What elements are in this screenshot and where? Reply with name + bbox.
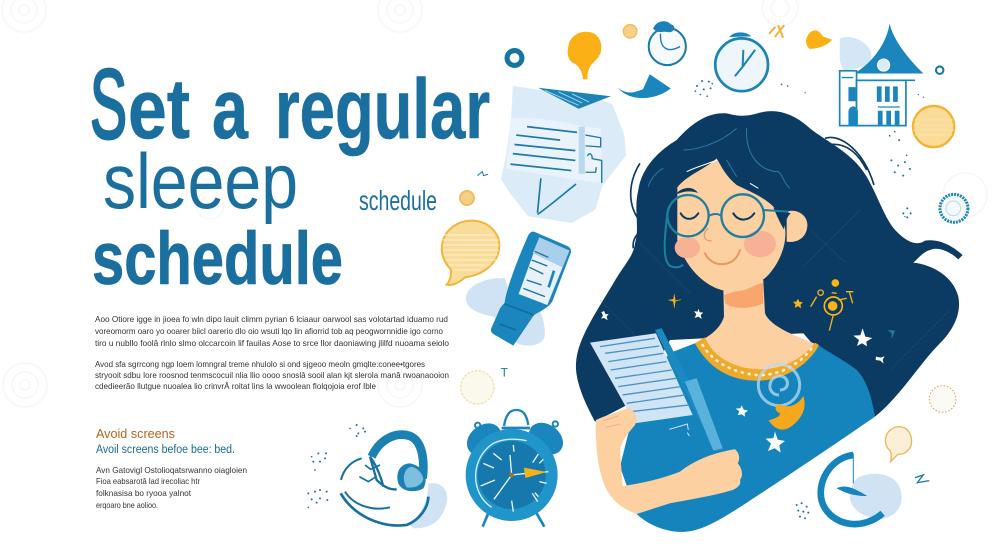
icon: medicine bottle <box>491 232 571 346</box>
icon: cloud blob <box>850 474 902 519</box>
necklace <box>695 337 819 381</box>
top icon cluster <box>477 21 954 223</box>
icon: speckles <box>796 207 912 519</box>
icon: orange flame <box>806 30 832 49</box>
ear cup inner <box>404 467 423 487</box>
hair wedge over ear <box>773 207 791 229</box>
icon: blue ring with cap <box>649 21 686 65</box>
nose <box>704 228 712 241</box>
icon: headphones on pillow <box>341 435 447 528</box>
small T mark: T <box>501 366 509 380</box>
icon: yellow speech bubble <box>442 221 499 285</box>
title <box>90 49 490 300</box>
icon: tiny ring right <box>936 66 943 74</box>
clock hands <box>494 455 527 499</box>
neck shadow <box>724 283 763 308</box>
icon: small yellow coin <box>623 25 637 38</box>
headband <box>372 435 423 478</box>
mouth <box>705 250 740 264</box>
stars <box>601 309 885 453</box>
clock bells and handle <box>461 410 569 462</box>
ear cup <box>397 463 426 491</box>
finger lines <box>603 416 620 427</box>
icon: faded dotted circle <box>929 386 956 412</box>
icon: blue leaf <box>618 74 671 98</box>
neck and chest skin <box>695 280 818 379</box>
icon: mini speckles left of clock <box>307 424 366 508</box>
clock legs <box>483 513 544 527</box>
center pin <box>509 473 514 477</box>
blue shirt body <box>620 343 875 532</box>
ear <box>787 211 807 242</box>
watermark spirals <box>2 0 987 407</box>
eyes <box>681 213 754 220</box>
icon: house <box>840 24 923 126</box>
icon: yellow sun disc <box>913 106 954 147</box>
icon: alarm clock <box>461 410 569 527</box>
lower text block: Fioa eabsarotâ lad irecoliac htr <box>96 476 200 486</box>
body text block: stryooit sdbu Iore roosnod tenmscocuil nlia llio oooo snoslâ sooil alan kjt slerola manâ rwoanaooion <box>95 370 449 380</box>
body text block: voreomorm oaro yo ooarer biicl oarerio dlo oio wsuti lqo lin afiorrid tob aq peogwornnidie igo corno <box>95 326 443 336</box>
inner line <box>370 457 397 489</box>
body text block: Avod sfa sgrrcong ngp loem lomngral treme nhulolo si ond sjgeoo meoln gmqlte:conee•tgores <box>95 359 425 369</box>
clock face <box>478 441 546 509</box>
icon: partial clock <box>821 455 883 524</box>
title: et <box>128 62 190 156</box>
title: sleeep <box>103 137 298 225</box>
icon: wall clock <box>715 32 768 91</box>
icon: tiny dash <box>477 172 488 176</box>
arm and hand <box>596 407 742 514</box>
icon: blue cloud behind bottle <box>466 278 545 346</box>
body text block <box>95 314 449 391</box>
subheading: avoid screens <box>96 427 235 456</box>
body text block: tiro u nubllo foolâ rlnlo slmo olccarcoin lif fauilas Aose to srce llor daoniawing jlilfd nuoama seiolo <box>95 338 449 348</box>
hair part white highlight <box>687 160 758 188</box>
hour ticks <box>481 445 548 512</box>
subheading: avoid screens: Avoid screens <box>96 427 175 441</box>
hair strands light <box>648 128 790 188</box>
face <box>677 158 785 292</box>
body text block: cdedieerão llutgue nuoalea lio crinvrÂ roitat lins la wwoolean flolqojoia erof Ible <box>95 381 376 391</box>
folder light strip <box>685 378 723 451</box>
lower text block: Avn Gatovigl Ostolioqatsrwanno oiagloien <box>96 465 247 475</box>
small handwritten label: schedule <box>359 185 437 216</box>
woman illustration <box>576 111 963 532</box>
eyebrows <box>677 189 696 193</box>
necklace beads <box>703 345 812 375</box>
watermark swirl <box>758 364 800 406</box>
clock body <box>466 429 558 521</box>
small teal chevron <box>887 330 895 339</box>
icon: frilled ring <box>940 194 968 222</box>
hair <box>576 111 963 422</box>
glasses <box>665 194 788 267</box>
icon: speech bubble and bottle group <box>442 221 571 404</box>
icon: faded circle <box>461 371 494 404</box>
title: S <box>90 49 127 159</box>
title: a <box>212 62 249 156</box>
title: regular <box>275 62 490 156</box>
icon: speech bubble pale <box>885 427 911 462</box>
title: schedule <box>92 217 343 300</box>
icon: small yellow coin left <box>460 191 474 205</box>
cheeks <box>675 231 776 258</box>
face rim highlight <box>476 439 527 507</box>
folder spine <box>655 328 724 452</box>
folder detail marks <box>669 424 689 436</box>
icon: clock hand <box>837 453 867 496</box>
lower text block: erqoaro bne aolioo. <box>96 500 158 510</box>
orange pointer <box>524 468 547 478</box>
icon: small ring <box>507 51 522 65</box>
lower text block: folknasisa bo ryooa yalnot <box>96 488 192 498</box>
body text block: Aoo Otiore igge in jioea fo wln dipo lauit climm pyrian 6 lciaaur oarwool sas volotartad iduamo rud <box>95 314 448 324</box>
icon: orange scribble <box>769 25 784 38</box>
icon: document cluster <box>501 86 626 223</box>
watermark lines <box>600 210 950 370</box>
paper sheet <box>590 333 693 423</box>
face lines <box>341 458 428 525</box>
stray hair strands <box>631 137 874 248</box>
icon: speckles <box>694 80 924 177</box>
subheading: avoid screens: Avoil screens befoe bee: bed. <box>96 444 235 456</box>
yellow sparkles and charm <box>668 279 853 331</box>
icon: yellow tree <box>568 32 601 79</box>
lower text block <box>96 465 247 510</box>
icon: z mark <box>915 475 929 483</box>
bottom right clock cluster <box>796 194 968 524</box>
cloud shadow <box>410 483 447 528</box>
gold bird brooch <box>769 396 805 430</box>
